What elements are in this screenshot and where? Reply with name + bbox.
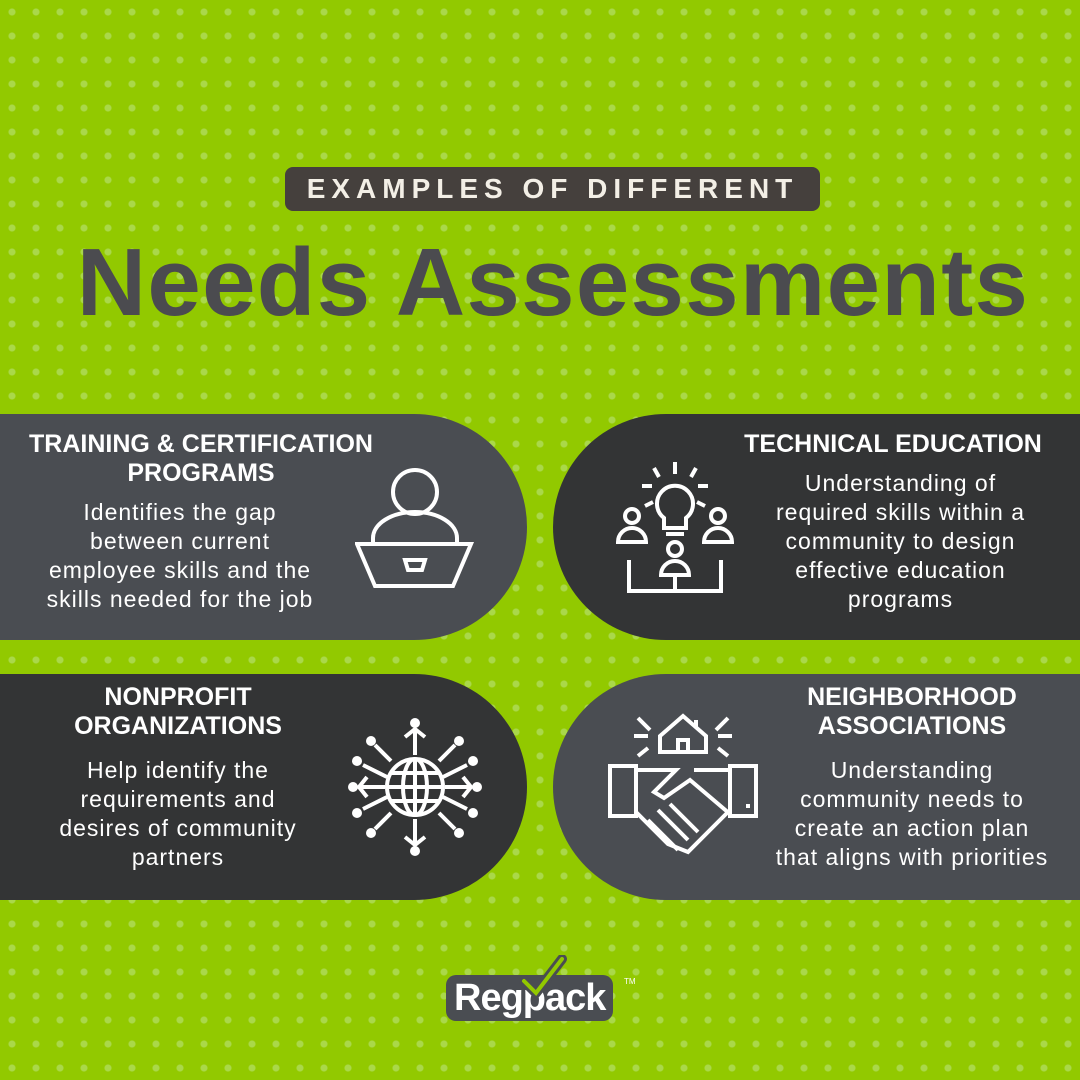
heading: PROGRAMS — [127, 459, 275, 487]
body text: programs — [848, 586, 953, 612]
heading — [29, 430, 373, 487]
body text: employee skills and the — [49, 557, 311, 583]
body text: partners — [132, 844, 224, 870]
heading: NONPROFIT — [104, 683, 252, 711]
body text: community to design — [786, 528, 1015, 554]
body text: skills needed for the job — [47, 586, 313, 612]
body text: Identifies the gap — [83, 499, 277, 525]
logo box: Regpack — [454, 977, 605, 1019]
checkmark — [522, 955, 567, 998]
body text: community needs to — [800, 786, 1024, 812]
body text — [776, 757, 1048, 870]
icon: lightbulb team — [616, 462, 734, 593]
icon: person at laptop — [355, 468, 474, 588]
heading: TRAINING & CERTIFICATION — [29, 430, 373, 458]
body text: requirements and — [80, 786, 276, 812]
panel: nonprofit organizations — [0, 674, 527, 900]
body text: that aligns with priorities — [776, 844, 1048, 870]
heading — [74, 683, 282, 740]
body text: required skills within a — [776, 499, 1025, 525]
panel: training & certification — [0, 414, 527, 640]
body text — [59, 757, 297, 870]
title: Needs Assessments — [77, 229, 1029, 336]
logo: Regpack — [446, 955, 636, 1021]
body text: effective education — [795, 557, 1006, 583]
subtitle pill: EXAMPLES OF DIFFERENT — [307, 173, 798, 204]
panel: neighborhood associations — [553, 674, 1080, 900]
subtitle pill — [285, 167, 820, 211]
logo: Regpack: TM — [624, 977, 636, 986]
body text: Understanding — [831, 757, 993, 783]
icon: handshake with house — [608, 714, 758, 854]
heading: ORGANIZATIONS — [74, 712, 282, 740]
body text — [776, 470, 1025, 612]
icon: globe with people — [348, 718, 482, 856]
heading: NEIGHBORHOOD — [807, 683, 1017, 711]
heading — [807, 683, 1017, 740]
body text: create an action plan — [795, 815, 1029, 841]
body text: Help identify the — [87, 757, 269, 783]
body text: between current — [90, 528, 270, 554]
heading: ASSOCIATIONS — [818, 712, 1006, 740]
body text: desires of community — [59, 815, 297, 841]
body text: Understanding of — [805, 470, 996, 496]
heading: TECHNICAL EDUCATION — [744, 430, 1042, 458]
body text — [47, 499, 313, 612]
panel: technical education — [553, 414, 1080, 640]
